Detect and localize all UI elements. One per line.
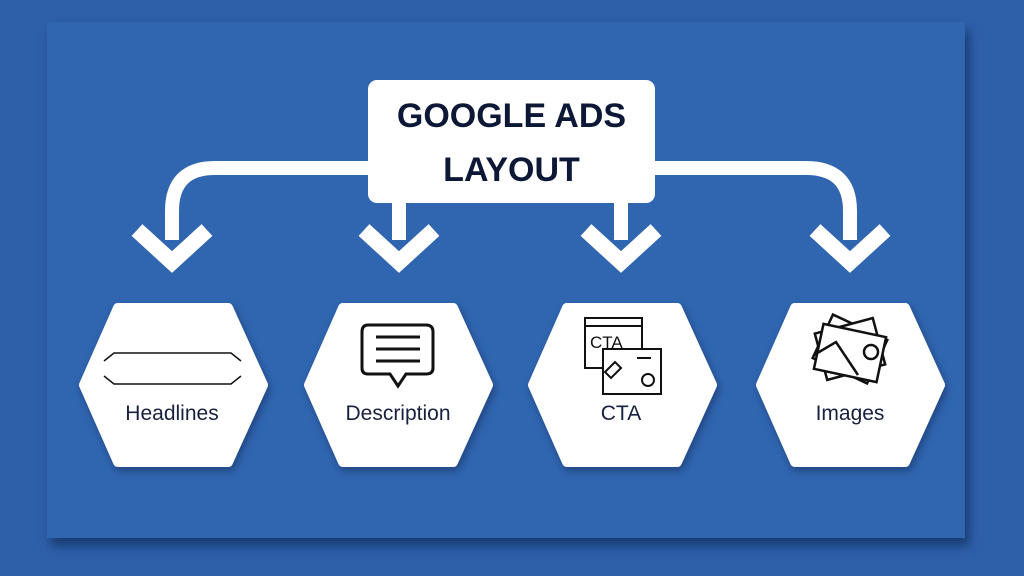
labels: Headlines xyxy=(125,402,219,425)
connector arrows xyxy=(137,168,885,262)
labels: Images xyxy=(816,402,884,425)
labels: Description xyxy=(345,402,451,425)
labels xyxy=(125,402,884,425)
labels: CTA xyxy=(601,402,641,425)
title box: GOOGLE ADS xyxy=(397,97,626,135)
icon: headline bar xyxy=(104,353,241,384)
icon: CTA windows: CTA xyxy=(590,333,623,352)
title box: LAYOUT xyxy=(443,151,580,189)
icon: images stack xyxy=(813,315,887,383)
hexagons xyxy=(84,308,940,462)
icon: CTA windows xyxy=(585,318,661,394)
title box xyxy=(368,80,655,203)
icon: speech bubble xyxy=(362,325,433,386)
